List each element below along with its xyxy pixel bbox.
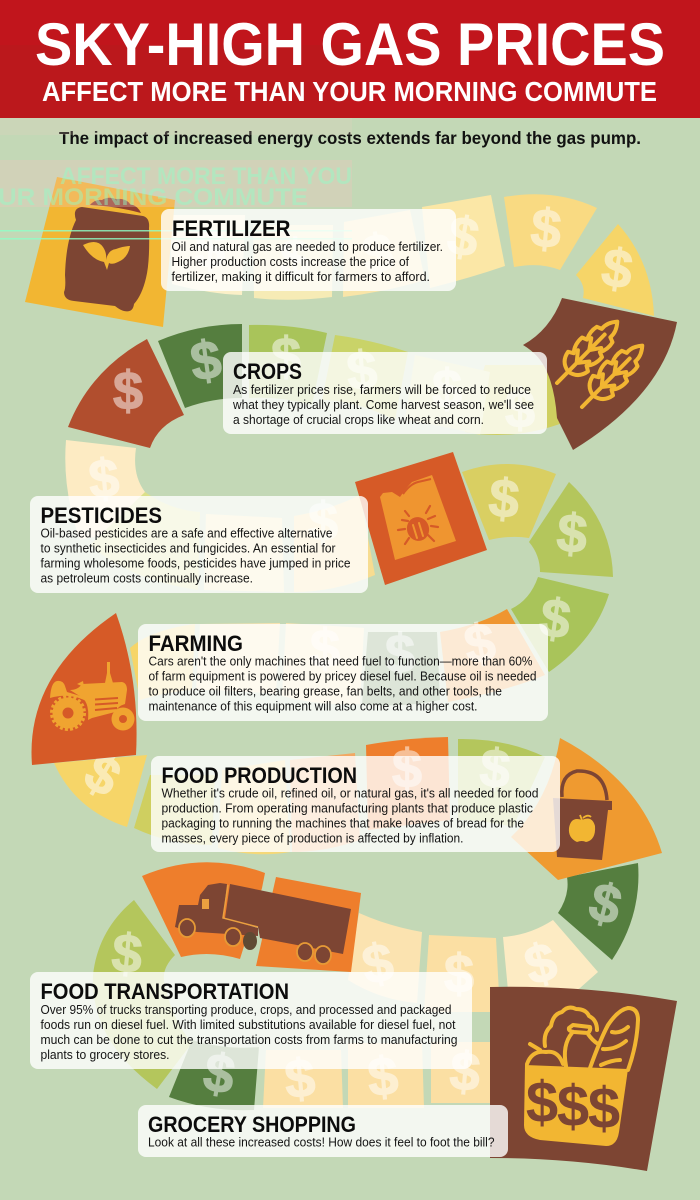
road tile: bottom bend 3: $ [358, 932, 398, 996]
road tile: bend cream: $ [86, 448, 121, 510]
text block: fertilizer: Higher production costs increase the price of [172, 254, 409, 269]
road tile: dark green bend: $ [583, 871, 628, 937]
text block: fertilizer: Oil and natural gas are needed to produce fertilizer. [172, 239, 443, 254]
road tile: fertilizer row 2: $ [280, 229, 310, 289]
road tile: lower row 3 [348, 1043, 424, 1108]
text block: food production: packaging to running the machines that make loaves of bread for the [162, 816, 524, 830]
intro line: The impact of increased energy costs extends far beyond the gas pump. [59, 128, 641, 148]
road tile: fertilizer row 1 [170, 215, 245, 295]
icon tile: wheat [523, 298, 677, 450]
text block: food production [162, 786, 538, 846]
icon tile: grocery bag: $ [557, 1074, 589, 1139]
text block: farming [148, 654, 536, 714]
road tile: production row 5 [458, 738, 545, 827]
text block: food production: production. From operating manufacturing plants that produce plastic [162, 800, 533, 816]
road tile: production row 3 [290, 753, 360, 852]
text block: farming: of farm equipment is powered by pricey diesel fuel. Because oil is needed [148, 668, 536, 684]
road tile: crops row 2 [405, 355, 490, 435]
text block: food transportation [40, 1002, 458, 1062]
road tile: fertilizer row 5 [504, 194, 597, 270]
road tile: bend cream [65, 440, 170, 540]
road tile: lower row dark green [169, 1040, 259, 1110]
road tile: farming row 4 [196, 623, 280, 694]
road tile: crops row 6 [68, 339, 184, 448]
heading: fertilizer: FERTILIZER [172, 216, 291, 241]
heading: food transportation: FOOD TRANSPORTATION [40, 979, 289, 1004]
panel: food production [151, 756, 560, 852]
text block: crops: As fertilizer prices rise, farmers will be forced to reduce [233, 382, 531, 397]
road tile: lower row 2 [263, 1048, 343, 1110]
text block: pesticides: as petroleum costs continually increase. [40, 570, 253, 586]
heading: crops: CROPS [233, 359, 302, 384]
text block: food transportation: plants to grocery stores. [40, 1047, 170, 1062]
text block: grocery shopping: Look at all these increased costs! How does it feel to foot the bill? [148, 1134, 494, 1150]
road tile: left green bend: $ [110, 923, 145, 985]
road tile: bottom bend 1 [503, 920, 598, 1012]
text block: farming: maintenance of this equipment will also come at a higher cost. [148, 698, 478, 714]
road tile: fertilizer row 6: $ [598, 237, 636, 301]
subtitle: AFFECT MORE THAN YOUR MORNING COMMUTE [42, 76, 657, 107]
road tile: pesticides row 3 [294, 492, 375, 592]
road tile: farming row 2: $ [385, 624, 415, 684]
road tile: fertilizer row 3: $ [359, 222, 397, 286]
road tile: crops row 5: $ [187, 329, 225, 393]
road tile: crops row 1: $ [505, 379, 535, 439]
text block: crops: a shortage of crucial crops like wheat and corn. [233, 412, 484, 427]
road tile: production row 5: $ [478, 738, 513, 800]
icon tile: truck [142, 862, 361, 972]
road tile: farming row 1: $ [460, 612, 500, 676]
panel: grocery shopping [138, 1105, 508, 1157]
road tile: fertilizer row 5: $ [529, 198, 564, 260]
icon tile: tractor [32, 613, 137, 765]
road tile: bottom bend 3 [348, 913, 422, 1003]
icon tile: pesticide jug [355, 452, 487, 585]
road tile: lower row 4 [431, 1041, 491, 1103]
text block: food production: Whether it's crude oil, refined oil, or natural gas, it's all needed for food [162, 786, 538, 800]
road tile: bottom bend 2: $ [444, 944, 474, 1004]
road tile: bottom bend 1: $ [518, 931, 563, 997]
road tile: lower row 3: $ [365, 1046, 400, 1108]
road tile: pesticide right 1 [462, 464, 556, 540]
heading: grocery shopping: GROCERY SHOPPING [148, 1112, 356, 1137]
compression ghost bands: UR MORNING COMMUTE [0, 184, 308, 211]
road tile: crops row 4 [249, 325, 327, 405]
road tile: production row 2 [218, 760, 290, 854]
heading: food production: FOOD PRODUCTION [162, 763, 357, 788]
panel: farming [138, 624, 548, 721]
text block: food transportation: Over 95% of trucks transporting produce, crops, and processed and packaged [40, 1002, 452, 1017]
road tile: crops row 1 [465, 365, 575, 439]
road tile: lower row dark green: $ [199, 1042, 239, 1106]
road tile: yellow below tractor [54, 742, 147, 827]
compression ghost bands: AFFECT MORE THAN YOU [60, 163, 352, 190]
panel: food transportation [30, 972, 472, 1069]
road tile: pesticide right 3 [511, 577, 609, 672]
road tile: pesticides row 2 [204, 514, 284, 592]
road tile: fertilizer row 4: $ [443, 205, 483, 269]
text block: food production: masses, every piece of production is affected by inflation. [162, 830, 464, 846]
road tile: fertilizer row 6 [576, 224, 654, 316]
icon tile: bucket [511, 738, 662, 880]
road tile: pesticide right 2 [529, 482, 613, 577]
road tile: crops row 3 [322, 335, 408, 420]
road tile: crops row 3: $ [344, 340, 379, 402]
road tile: fertilizer row 3 [343, 210, 425, 297]
road tile: farming row 3 [282, 619, 364, 704]
road tile: crops row 6: $ [113, 361, 143, 421]
road tile: pesticide right 1: $ [487, 468, 522, 530]
text block: food transportation: foods run on diesel fuel. With limited substitutions available for diesel fuel, not [40, 1017, 456, 1032]
road tile: crops row 2: $ [432, 359, 462, 419]
text block: pesticides: farming wholesome foods, pesticides have jumped in price [40, 556, 350, 570]
road tile: bottom bend 2 [424, 935, 500, 1012]
icon tile: grocery bag [490, 987, 677, 1171]
road tile: farming row 5 [130, 624, 195, 700]
road tile: production row 4: $ [392, 739, 422, 799]
road tile: production row 1 [134, 775, 215, 845]
compression ghost bands [0, 118, 352, 240]
text block: farming: Cars aren't the only machines that need fuel to function—more than 60% [148, 654, 533, 668]
text block: pesticides: Oil-based pesticides are a safe and effective alternative [40, 526, 332, 540]
road tile: pesticides row 3: $ [308, 492, 338, 552]
road tile: farming row 1 [440, 609, 545, 702]
header banner [0, 0, 700, 118]
text block: food transportation: much can be done to cut the transportation costs from farms to manufacturing [40, 1032, 458, 1047]
road tile: lower row 2: $ [282, 1048, 317, 1110]
road tile: crops row 4: $ [271, 327, 301, 387]
road tile: yellow below tractor: $ [74, 742, 131, 809]
title: SKY-HIGH GAS PRICES [35, 11, 665, 78]
road tile: pesticides row 1 [90, 492, 200, 590]
road tile: fertilizer row 4 [422, 195, 505, 288]
road tile: farming row 2 [362, 624, 440, 705]
text block: pesticides: to synthetic insecticides and fungicides. An essential for [40, 540, 336, 556]
road tile: fertilizer row 1: $ [195, 219, 225, 279]
icon tile: grocery bag: $ [588, 1076, 620, 1141]
text block: farming: to produce oil filters, bearing grease, fan belts, and other tools, the [148, 684, 502, 698]
text block: fertilizer: fertilizer, making it difficult for farmers to afford. [172, 269, 430, 284]
panel: fertilizer [161, 209, 456, 291]
text block: pesticides [40, 526, 350, 586]
icon tile: fertilizer bag [25, 177, 175, 327]
road tile: fertilizer row 2 [253, 225, 333, 300]
road tile: lower row 4: $ [448, 1041, 483, 1103]
icon tile: grocery bag: $ [526, 1070, 558, 1135]
panel: pesticides [30, 496, 368, 593]
road tile: farming row 3: $ [310, 619, 340, 679]
road tile: pesticide right 2: $ [555, 503, 590, 565]
heading: farming: FARMING [148, 631, 243, 656]
heading: pesticides: PESTICIDES [40, 503, 162, 528]
road tile: crops row 5 [158, 324, 242, 408]
road tile: left green bend [93, 900, 192, 1089]
panel: crops [223, 352, 547, 434]
road tile: pesticide right 3: $ [536, 587, 574, 651]
text block: crops [232, 382, 534, 427]
text block: crops: what they typically plant. Come harvest season, we'll see [232, 397, 534, 412]
text block: fertilizer [172, 239, 443, 284]
road tile: dark green bend [558, 863, 638, 960]
road tile: production row 4 [366, 737, 450, 830]
